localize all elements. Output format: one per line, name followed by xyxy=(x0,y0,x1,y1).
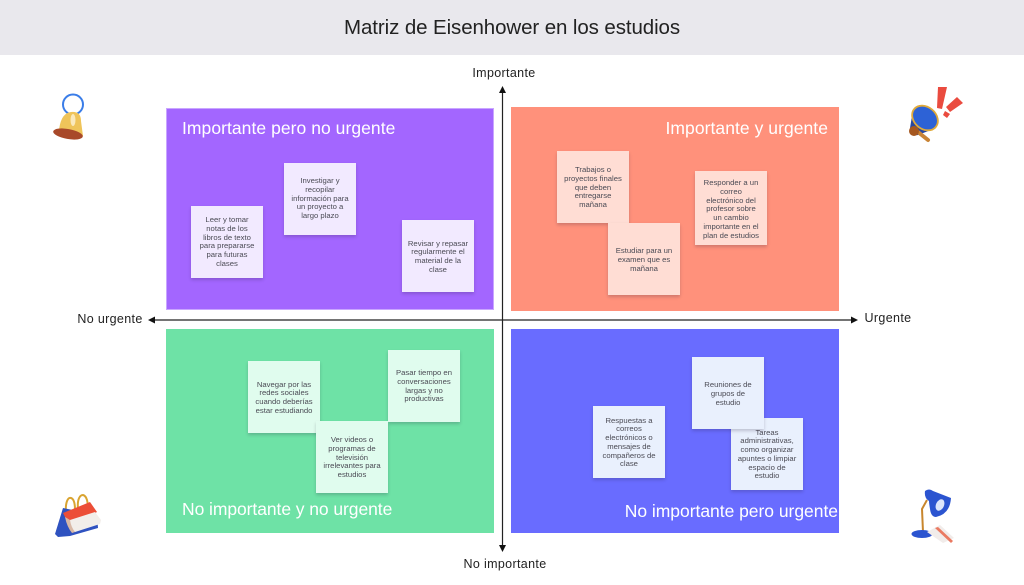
axis label: no importante: No importante xyxy=(463,557,547,571)
note: ver videos: televisión xyxy=(336,453,368,462)
note: redes sociales: Navegar por las xyxy=(257,380,311,388)
note: responder correo: plan de estudios xyxy=(703,231,759,240)
note: tareas administrativas: Tareas xyxy=(755,428,779,436)
note: leer libros: para prepararse xyxy=(200,241,254,250)
note: trabajos finales: Trabajos o xyxy=(575,165,611,174)
icon: calendar xyxy=(55,494,101,537)
note: pasar tiempo: Pasar tiempo en xyxy=(396,368,452,377)
note: responder correo: correo xyxy=(720,187,742,196)
panel: importante pero no urgente xyxy=(166,108,494,310)
note: reuniones: grupos de xyxy=(711,389,745,398)
note: revisar: material de la xyxy=(415,256,461,265)
note: investigar: un proyecto a xyxy=(297,202,343,211)
note: investigar: recopilar xyxy=(305,185,335,194)
note: responder correo: importante en el xyxy=(703,222,759,231)
note: redes sociales: estar estudiando xyxy=(256,406,312,415)
note: tareas administrativas: como organizar xyxy=(740,445,793,454)
note: revisar: regularmente el xyxy=(411,247,465,256)
note: trabajos finales: mañana xyxy=(579,200,607,209)
note: pasar tiempo: productivas xyxy=(404,394,444,403)
note: redes sociales xyxy=(248,361,320,433)
axis label: importante: Importante xyxy=(472,66,536,80)
note: leer libros: Leer y tomar xyxy=(205,215,249,224)
note: estudiar examen: mañana xyxy=(630,264,658,273)
note: respuestas a correos: Respuestas a xyxy=(605,416,652,424)
panel: importante y urgente xyxy=(511,107,839,311)
header band xyxy=(0,0,1024,55)
note: revisar: clase xyxy=(429,265,447,274)
note: respuestas a correos: mensajes de xyxy=(607,442,651,451)
heading: no importante y no urgente: No importante y no urgente xyxy=(182,499,392,519)
note: trabajos finales: que deben xyxy=(575,183,611,192)
note: responder correo: Responder a un xyxy=(704,178,758,187)
note: tareas administrativas: espacio de xyxy=(748,463,786,472)
note: reuniones xyxy=(692,357,764,429)
note: ver videos: programas de xyxy=(328,444,376,453)
note: trabajos finales: entregarse xyxy=(575,191,611,200)
note: ver videos xyxy=(316,421,388,493)
note: investigar xyxy=(284,163,356,235)
note: revisar: Revisar y repasar xyxy=(408,238,468,248)
note: investigar: información para xyxy=(291,194,349,203)
title: Matriz de Eisenhower en los estudios xyxy=(344,16,680,39)
icon: bell xyxy=(53,94,84,140)
note: pasar tiempo: largas y no xyxy=(405,386,443,395)
note: ver videos: irrelevantes para xyxy=(323,461,381,470)
note: respuestas a correos: correos xyxy=(616,424,642,433)
icon: desk lamp and book xyxy=(912,490,954,543)
note: leer libros: libros de texto xyxy=(203,233,251,242)
note: tareas administrativas: administrativas, xyxy=(740,436,794,445)
note: trabajos finales xyxy=(557,151,629,223)
note: respuestas a correos: compañeros de xyxy=(602,451,656,460)
note: estudiar examen xyxy=(608,223,680,295)
note: tareas administrativas xyxy=(731,418,803,490)
note: estudiar examen: examen que es xyxy=(618,255,670,264)
note: respuestas a correos: electrónicos o xyxy=(605,433,653,442)
note: investigar: largo plazo xyxy=(301,211,339,220)
note: reuniones: Reuniones de xyxy=(704,380,752,389)
note: leer libros: para futuras xyxy=(206,250,248,259)
heading: importante y urgente: Importante y urgente xyxy=(666,118,828,138)
note: leer libros xyxy=(191,206,263,278)
note: redes sociales: redes sociales xyxy=(259,388,309,397)
note: ver videos: estudios xyxy=(338,470,366,479)
note: estudiar examen: Estudiar para un xyxy=(616,246,672,255)
note: responder correo: un cambio xyxy=(713,213,749,222)
axis label: no urgente: No urgente xyxy=(77,312,143,326)
note: leer libros: notas de los xyxy=(206,224,248,233)
note: respuestas a correos: clase xyxy=(620,459,638,468)
note: reuniones: estudio xyxy=(716,398,740,407)
note: responder correo: profesor sobre xyxy=(706,204,756,213)
note: pasar tiempo: conversaciones xyxy=(397,377,451,386)
heading: importante pero no urgente: Importante pero no urgente xyxy=(182,118,395,138)
panel: no importante y no urgente xyxy=(166,329,494,533)
axis label: urgente: Urgente xyxy=(865,311,911,325)
note: ver videos: Ver videos o xyxy=(331,435,373,444)
note: tareas administrativas: apuntes o limpiar xyxy=(738,454,796,463)
icon: megaphone with exclamation marks xyxy=(909,87,963,142)
note: trabajos finales: proyectos finales xyxy=(564,174,622,183)
note: redes sociales: cuando deberías xyxy=(255,397,313,406)
note: leer libros: clases xyxy=(216,259,238,268)
note: respuestas a correos xyxy=(593,406,665,478)
panel: no importante pero urgente xyxy=(511,329,839,533)
heading: no importante pero urgente: No importante pero urgente xyxy=(625,501,838,521)
note: responder correo xyxy=(695,171,767,245)
note: tareas administrativas: estudio xyxy=(755,471,779,480)
note: investigar: Investigar y xyxy=(300,176,340,185)
note: responder correo: electrónico del xyxy=(706,196,756,205)
note: pasar tiempo xyxy=(388,350,460,422)
note: revisar xyxy=(402,220,474,292)
